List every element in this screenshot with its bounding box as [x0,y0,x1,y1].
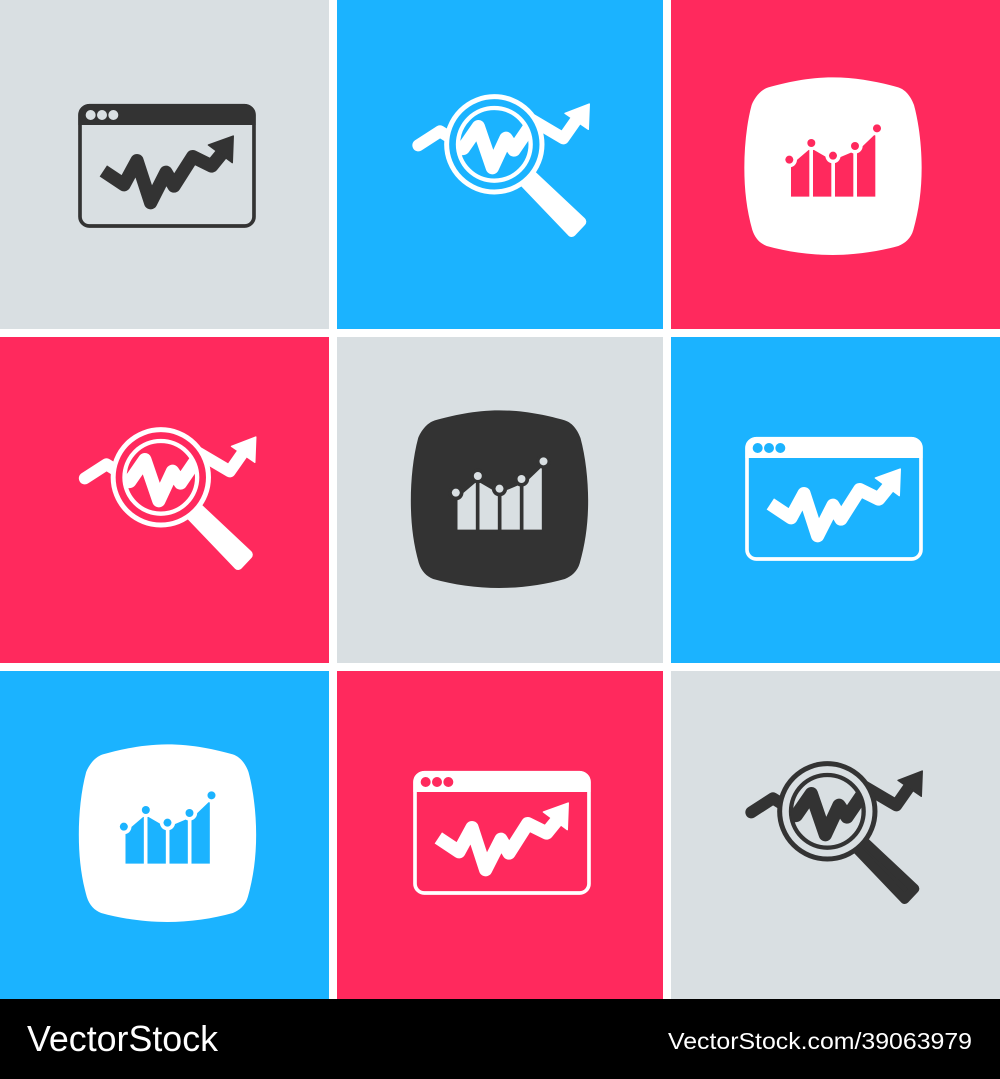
icon: magnifier over trend line [418,97,589,232]
panel: browser chart on grey [0,0,329,329]
panel: magnifier on blue [337,0,663,329]
panel: browser chart on blue [671,337,1000,663]
icon: magnifier over trend line [85,430,256,565]
footer logo text: VectorStock [27,1018,219,1059]
footer bar [0,999,1000,1079]
icon: rounded badge with bar chart [744,77,922,255]
icon: rounded badge with bar chart [79,744,256,922]
icon: browser window with rising line [413,771,591,893]
panel: bar chart on grey [337,337,663,663]
icon: rounded badge with bar chart [411,410,588,588]
panel: magnifier on red [0,337,329,663]
icon: browser window with rising line [78,104,256,226]
panel: magnifier on grey [671,671,1000,999]
footer image id: VectorStock.com/39063979 [668,1028,972,1054]
icon: browser window with rising line [745,437,923,559]
panel: bar chart on red [671,0,1000,329]
panel: bar chart on blue [0,671,329,999]
icon: magnifier over trend line [751,764,922,899]
panel: browser chart on red [337,671,663,999]
